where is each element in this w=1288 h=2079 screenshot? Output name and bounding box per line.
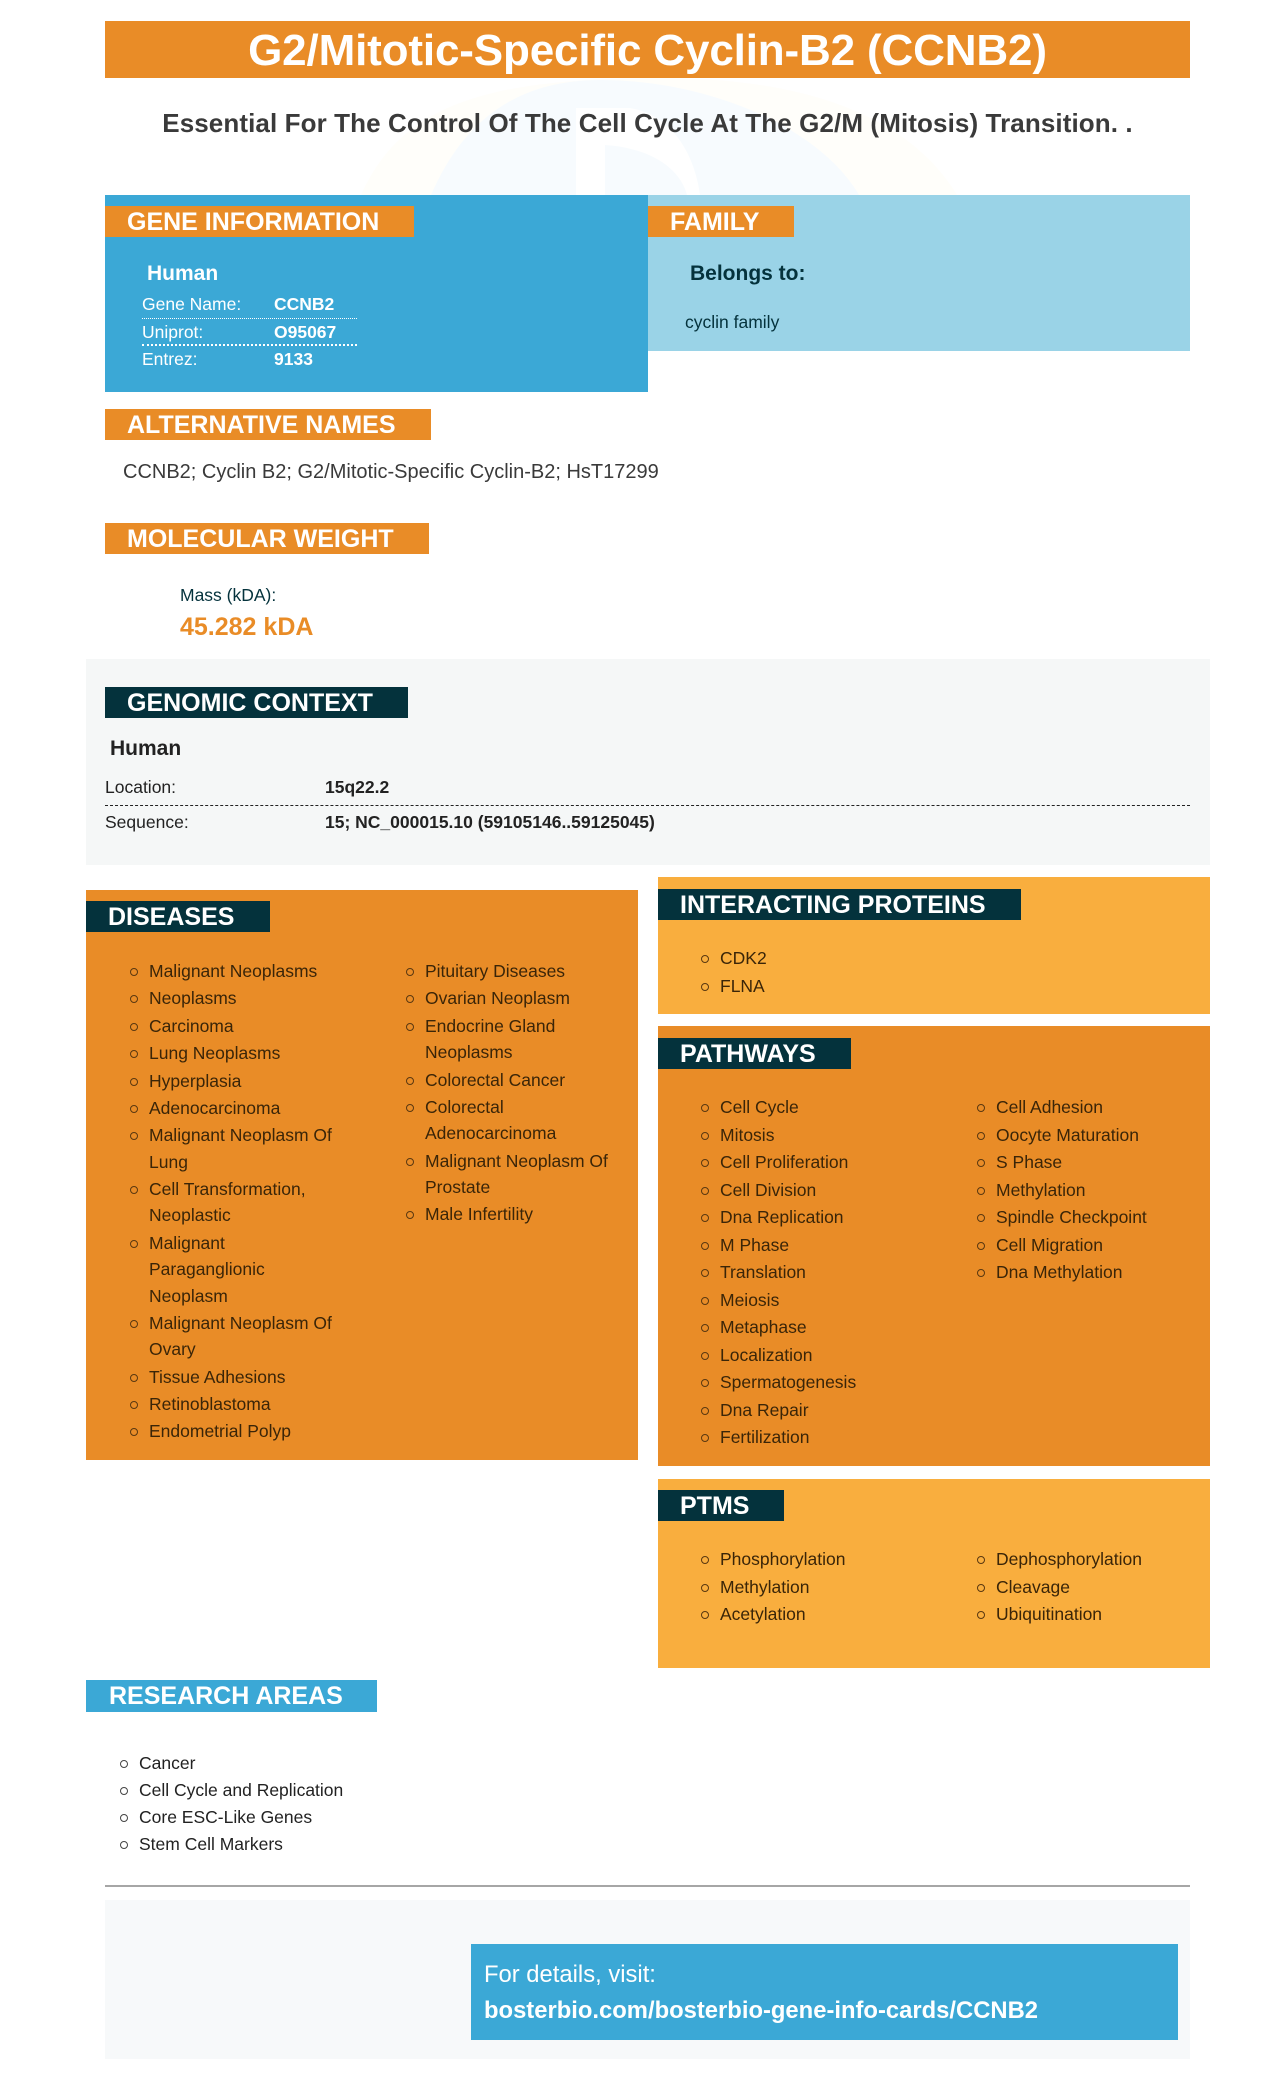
callout: details link (471, 1944, 1178, 2040)
panel: diseases (86, 890, 638, 1460)
research areas list: Cancer (139, 1752, 195, 1772)
diseases list column 1: Adenocarcinoma (149, 1098, 280, 1118)
diseases list column 1: Cell Transformation, (149, 1179, 306, 1199)
title (105, 21, 1190, 78)
species label: Human (147, 262, 218, 285)
pathways list column 1 (701, 1097, 856, 1447)
subtitle: Essential For The Control Of The Cell Cycle At The G2/M (Mitosis) Transition. . (162, 108, 1133, 138)
pathways list column 1: M Phase (720, 1234, 789, 1254)
diseases list column 2: Colorectal (425, 1097, 504, 1117)
heading: pathways (658, 1038, 851, 1069)
research areas list: Cell Cycle and Replication (139, 1780, 343, 1800)
heading: research areas: RESEARCH AREAS (109, 1682, 343, 1710)
pathways list column 1: Mitosis (720, 1124, 774, 1144)
ptms list column 2: Ubiquitination (996, 1604, 1102, 1624)
diseases list column 1: Neoplasms (149, 988, 237, 1008)
pathways list column 2: Methylation (996, 1180, 1086, 1200)
gene info table: Entrez: (142, 349, 197, 369)
sequence row: 15; NC_000015.10 (59105146..59125045) (325, 812, 655, 832)
ptms list column 1 (701, 1549, 846, 1624)
pathways list column 1: Metaphase (720, 1317, 807, 1337)
heading: gene information: GENE INFORMATION (127, 208, 379, 236)
diseases list column 2: Endocrine Gland (425, 1016, 555, 1036)
gene info table: O95067 (274, 322, 336, 342)
diseases list column 1 (130, 961, 332, 1441)
callout label: For details, visit: (484, 1961, 656, 1988)
heading: molecular weight: MOLECULAR WEIGHT (127, 525, 394, 553)
interacting proteins list: CDK2 (720, 948, 767, 968)
diseases list column 1: Tissue Adhesions (149, 1367, 286, 1387)
research areas list: Stem Cell Markers (139, 1834, 283, 1854)
ptms list column 2: Dephosphorylation (996, 1549, 1142, 1569)
heading: diseases (86, 901, 270, 932)
diseases list column 1: Neoplasm (149, 1286, 228, 1306)
diseases list column 1: Retinoblastoma (149, 1394, 271, 1414)
location row: Location: (105, 777, 176, 797)
diseases list column 1: Carcinoma (149, 1016, 234, 1036)
heading: ptms (658, 1490, 784, 1521)
pathways list column 1: Localization (720, 1344, 812, 1364)
diseases list column 2: Male Infertility (425, 1204, 533, 1224)
pathways list column 1: Translation (720, 1262, 806, 1282)
watermark logo (340, 78, 980, 198)
diseases list column 1: Paraganglionic (149, 1259, 265, 1279)
pathways list column 2: Oocyte Maturation (996, 1124, 1139, 1144)
pathways list column 2: Cell Migration (996, 1234, 1103, 1254)
pathways list column 1: Spermatogenesis (720, 1372, 856, 1392)
heading: interacting proteins: INTERACTING PROTEINS (680, 891, 986, 919)
mass value: 45.282 kDA (180, 613, 313, 641)
pathways list column 2: S Phase (996, 1152, 1062, 1172)
pathways list column 1: Cell Proliferation (720, 1152, 848, 1172)
title: G2/Mitotic-Specific Cyclin-B2 (CCNB2) (248, 26, 1047, 75)
heading: genomic context: GENOMIC CONTEXT (127, 689, 373, 717)
diseases list column 1: Hyperplasia (149, 1071, 241, 1091)
panel: family (648, 195, 1190, 351)
species label: Human (110, 737, 181, 760)
gene info table: CCNB2 (274, 294, 334, 314)
interacting proteins list: FLNA (720, 976, 765, 996)
heading: alternative names: ALTERNATIVE NAMES (127, 411, 396, 439)
ptms list column 2 (977, 1549, 1142, 1624)
diseases list column 1: Endometrial Polyp (149, 1421, 291, 1441)
diseases list column 2: Colorectal Cancer (425, 1070, 565, 1090)
pathways list column 1: Dna Repair (720, 1400, 809, 1420)
heading: diseases: DISEASES (108, 903, 234, 931)
heading: family: FAMILY (670, 208, 759, 236)
ptms list column 1: Methylation (720, 1576, 810, 1596)
footer rule (105, 1885, 1190, 1887)
diseases list column 2 (406, 961, 608, 1224)
pathways list column 2 (977, 1097, 1147, 1282)
diseases list column 1: Malignant Neoplasm Of (149, 1313, 332, 1333)
pathways list column 1: Fertilization (720, 1427, 809, 1447)
diseases list column 1: Ovary (149, 1339, 196, 1359)
diseases list column 1: Malignant (149, 1233, 225, 1253)
diseases list column 2: Neoplasms (425, 1042, 513, 1062)
interacting proteins list (701, 948, 767, 996)
mass label: Mass (kDA): (180, 585, 276, 605)
sequence row: Sequence: (105, 812, 189, 832)
sequence row (105, 812, 655, 832)
gene info table: 9133 (274, 349, 313, 369)
diseases list column 2: Adenocarcinoma (425, 1123, 556, 1143)
pathways list column 2: Dna Methylation (996, 1262, 1122, 1282)
gene info table: Gene Name: (142, 294, 241, 314)
diseases list column 1: Malignant Neoplasm Of (149, 1125, 332, 1145)
panel: interacting proteins (658, 877, 1210, 1014)
heading: pathways: PATHWAYS (680, 1040, 816, 1068)
gene info table: Uniprot: (142, 322, 203, 342)
pathways list column 1: Cell Cycle (720, 1097, 799, 1117)
diseases list column 2: Malignant Neoplasm Of (425, 1151, 608, 1171)
pathways list column 1: Dna Replication (720, 1207, 844, 1227)
diseases list column 2: Pituitary Diseases (425, 961, 565, 981)
panel: ptms (658, 1479, 1210, 1668)
research areas list: Core ESC-Like Genes (139, 1806, 312, 1826)
diseases list column 2: Ovarian Neoplasm (425, 988, 570, 1008)
heading: ptms: PTMS (680, 1492, 749, 1520)
diseases list column 1: Neoplastic (149, 1205, 231, 1225)
callout url: bosterbio.com/bosterbio-gene-info-cards/CCNB2 (484, 1997, 1038, 2024)
research areas list (120, 1752, 343, 1854)
panel: footer (105, 1900, 1190, 2059)
pathways list column 2: Spindle Checkpoint (996, 1207, 1147, 1227)
alternative names text: CCNB2; Cyclin B2; G2/Mitotic-Specific Cyclin-B2; HsT17299 (123, 461, 659, 483)
location row: 15q22.2 (325, 777, 389, 797)
diseases list column 1: Lung Neoplasms (149, 1043, 280, 1063)
family value: cyclin family (685, 312, 779, 332)
ptms list column 1: Acetylation (720, 1604, 806, 1624)
diseases list column 2: Prostate (425, 1177, 490, 1197)
panel: pathways (658, 1026, 1210, 1466)
pathways list column 1: Meiosis (720, 1290, 779, 1310)
panel: genomic context (86, 659, 1210, 865)
belongs to label: Belongs to: (690, 262, 806, 285)
diseases list column 1: Lung (149, 1152, 188, 1172)
pathways list column 1: Cell Division (720, 1180, 816, 1200)
heading: family (648, 206, 794, 237)
location row (105, 773, 1190, 806)
ptms list column 1: Phosphorylation (720, 1549, 846, 1569)
gene info table (142, 294, 357, 369)
diseases list column 1: Malignant Neoplasms (149, 961, 317, 981)
panel: gene information (105, 195, 648, 392)
ptms list column 2: Cleavage (996, 1576, 1070, 1596)
pathways list column 2: Cell Adhesion (996, 1097, 1103, 1117)
